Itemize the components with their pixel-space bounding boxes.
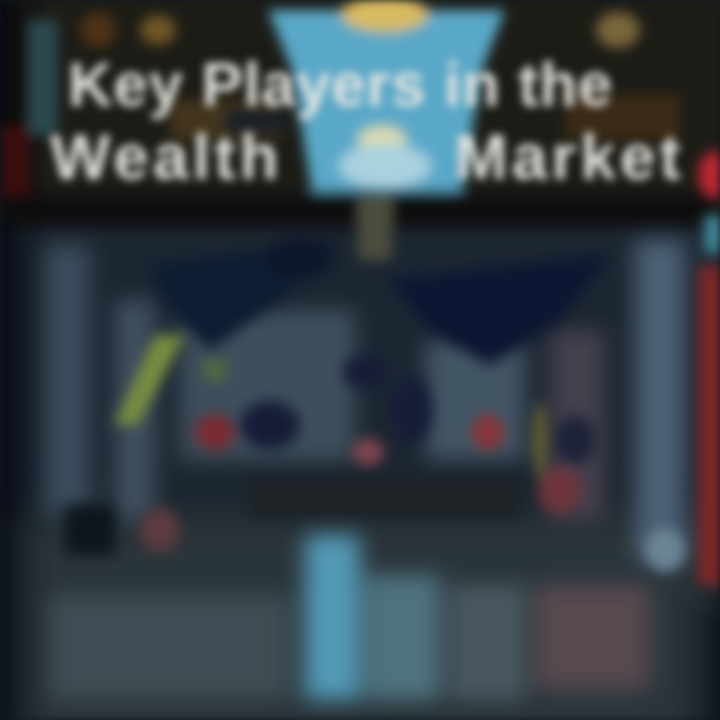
title line 2: Wealth Market xyxy=(50,121,685,193)
floor reflections xyxy=(50,535,650,700)
side columns xyxy=(45,240,685,560)
dark navy canopies xyxy=(150,238,610,464)
green, red and pale accents xyxy=(114,335,685,572)
title line 1: Key Players in the xyxy=(68,51,613,120)
counter band xyxy=(65,478,520,555)
ceiling: blue skylight and lamps xyxy=(0,0,720,260)
right red column xyxy=(698,151,720,585)
